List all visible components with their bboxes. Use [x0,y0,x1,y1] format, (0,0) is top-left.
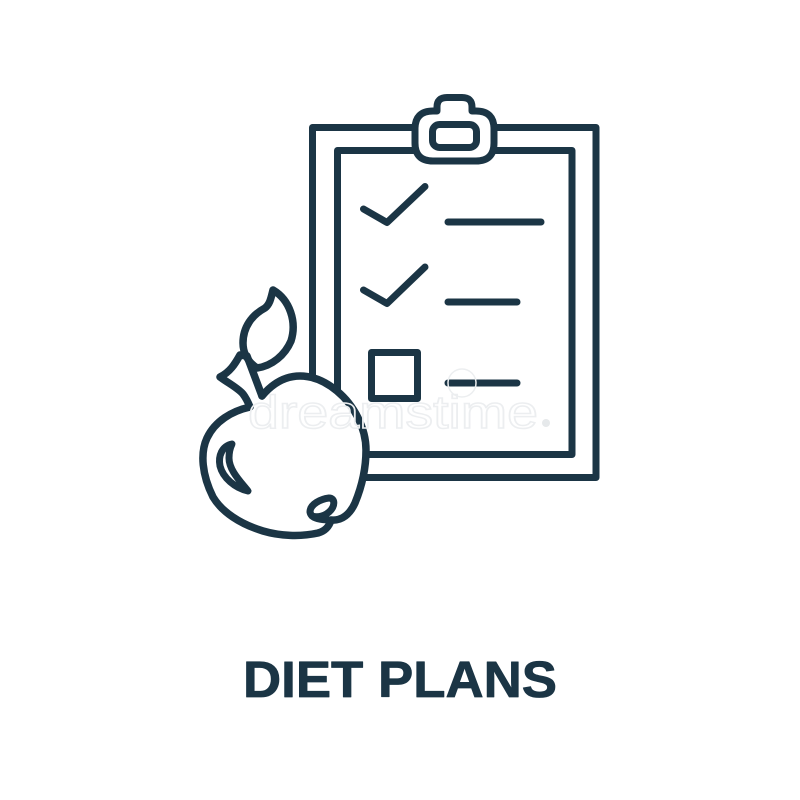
watermark [248,369,550,438]
apple body [203,376,366,535]
apple blossom end [310,498,334,520]
apple stem [220,355,262,407]
icon: apple [203,290,366,535]
title: DIET PLANS [243,651,557,708]
apple highlight [220,444,248,491]
clip slot [432,124,476,148]
unchecked box [372,352,418,398]
icon: clipboard [312,98,596,478]
apple leaf [243,290,293,368]
third list line [448,380,517,386]
clipboard inner sheet [338,150,572,454]
clipboard outer board [312,128,596,478]
clipboard clip [415,98,494,161]
first checkmark [364,186,425,222]
watermark text: dreamstime [248,386,538,438]
watermark dot [542,419,550,427]
watermark logo [448,369,476,397]
second list line [448,298,517,306]
second checkmark [364,267,425,304]
first list line [448,218,541,226]
